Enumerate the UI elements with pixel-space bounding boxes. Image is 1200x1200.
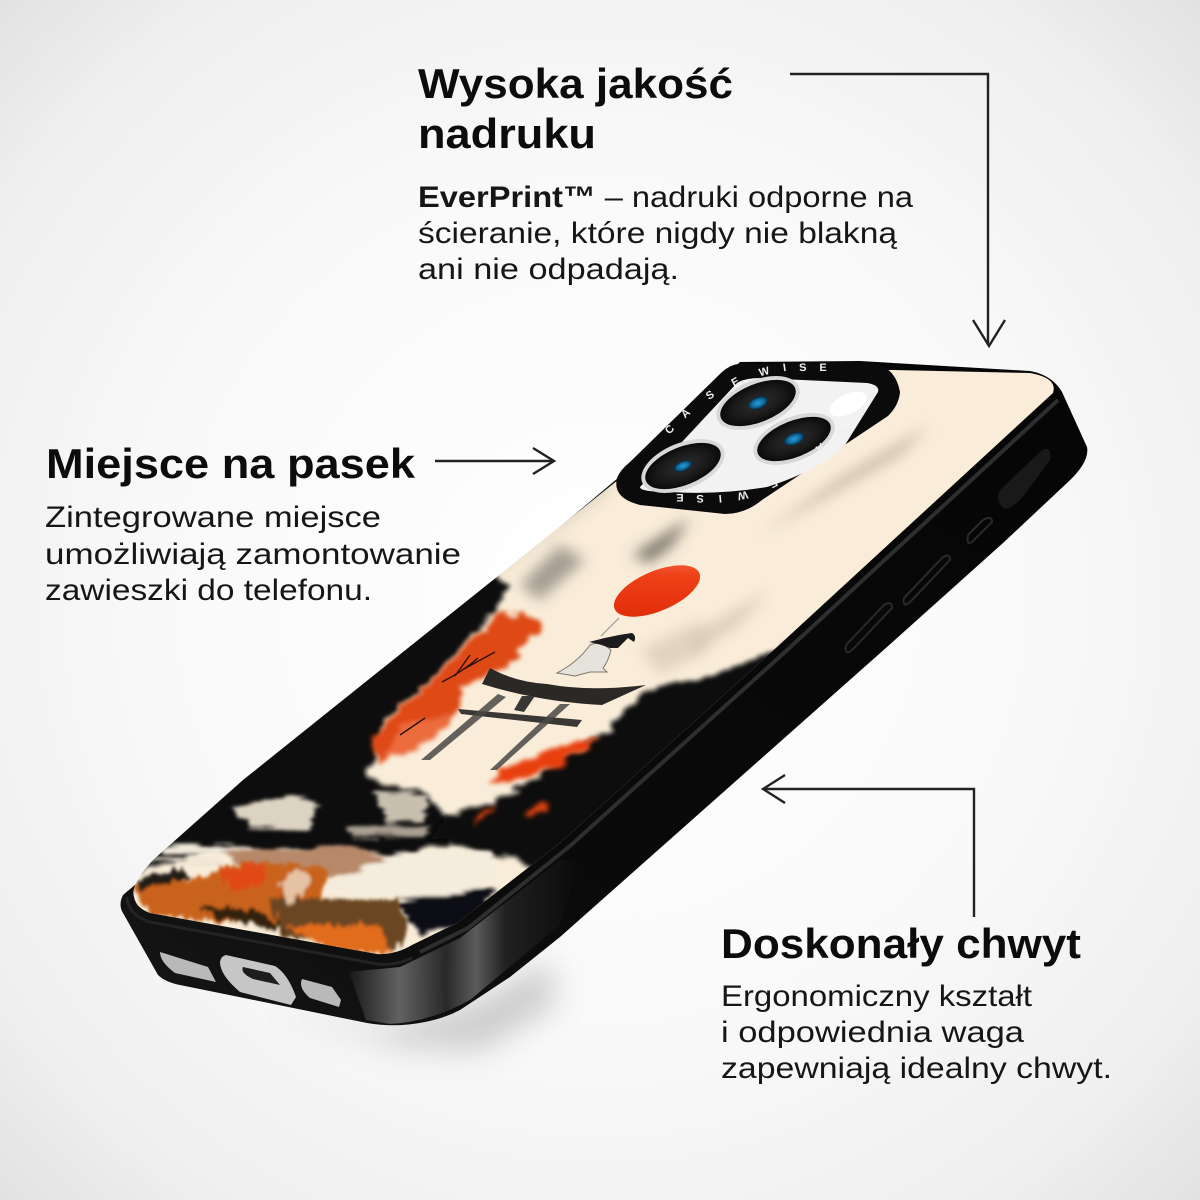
drop shadow under phone [270, 960, 555, 1050]
body text: zawieszki do telefonu. [45, 574, 372, 607]
balloon string [601, 618, 619, 636]
brand lettering: E [819, 362, 827, 374]
lens top [709, 365, 807, 441]
camera ring [616, 362, 900, 514]
body text: ścieranie, które nigdy nie blakną [418, 217, 897, 250]
volume up [904, 555, 950, 605]
brand lettering: C [663, 423, 677, 437]
body text: i odpowiednia waga [721, 1016, 1024, 1049]
brand lettering: S [696, 492, 704, 504]
brand lettering: S [704, 389, 717, 403]
body text: Zintegrowane miejsce [45, 501, 381, 534]
heading: Doskonały chwyt [721, 920, 1081, 967]
witch hat [589, 633, 635, 648]
artwork: torii gate [421, 668, 646, 770]
side buttons [846, 518, 992, 652]
glossy corner of case [349, 860, 580, 1024]
brand lettering: E [767, 476, 779, 490]
brand lettering: C [835, 425, 849, 439]
brand lettering: W [758, 365, 771, 379]
brand lettering: E [676, 491, 684, 503]
heading: Wysoka jakość [418, 60, 733, 107]
camera glass [640, 378, 878, 493]
body text [418, 181, 913, 286]
callout: print quality [418, 60, 913, 286]
callout: strap slot [45, 440, 461, 607]
right speaker [301, 979, 341, 1007]
artwork: left black mass [140, 574, 513, 876]
brand lettering: A [813, 440, 827, 454]
case body [120, 361, 1087, 1025]
callout: grip [721, 920, 1112, 1085]
brand lettering [663, 362, 849, 504]
ports on bottom edge [160, 952, 341, 1007]
silence switch [968, 518, 992, 543]
brand lettering: E [730, 375, 742, 389]
lens right [746, 402, 842, 476]
artwork [133, 370, 1054, 954]
artwork: orange lower band [130, 860, 410, 955]
body text: zapewniają idealny chwyt. [721, 1052, 1112, 1085]
artwork: right black mass [443, 640, 784, 870]
heading: nadruku [418, 110, 596, 157]
ghost body [557, 643, 611, 676]
artwork: upper smoke strokes [499, 429, 923, 674]
brand lettering: I [782, 362, 787, 374]
phone case [100, 350, 1100, 1025]
artwork: orange foliage [370, 612, 600, 825]
arrow: grip [763, 775, 974, 917]
raised rim around artwork [420, 400, 1058, 952]
brand lettering: I [718, 492, 722, 504]
body text: Ergonomiczny kształt [721, 980, 1033, 1013]
brand lettering: A [679, 407, 693, 421]
heading: Miejsce na pasek [46, 440, 416, 487]
flash [826, 386, 870, 422]
lens left [634, 428, 732, 504]
brand lettering: S [793, 459, 806, 473]
body text [45, 501, 461, 607]
artwork: tree branches [400, 652, 495, 735]
body text: ani nie odpadają. [418, 253, 679, 286]
brand lettering: S [799, 362, 807, 374]
heading [418, 60, 733, 157]
charging port opening [242, 967, 280, 985]
artwork: ghost with balloon [556, 565, 700, 676]
arrow: print quality [790, 74, 1005, 346]
body text: umożliwiają zamontowanie [45, 538, 461, 571]
arrow: strap slot [435, 448, 554, 474]
artwork: cream base [133, 370, 1054, 954]
body text: EverPrint™ – nadruki odporne na [418, 181, 913, 214]
artwork: white brush strokes [150, 790, 500, 935]
left speaker [160, 952, 216, 982]
strap slot [998, 449, 1050, 509]
brand lettering: W [736, 488, 749, 502]
charging port [220, 955, 296, 1005]
balloon [614, 565, 700, 617]
body text [721, 980, 1112, 1085]
volume down [846, 603, 892, 652]
camera island [616, 362, 900, 514]
